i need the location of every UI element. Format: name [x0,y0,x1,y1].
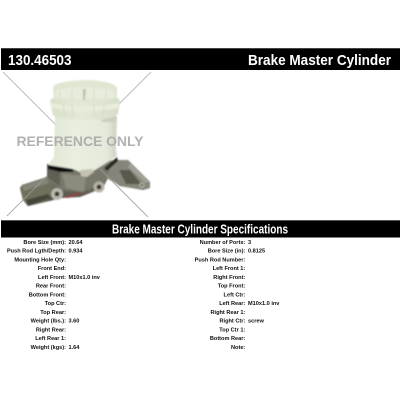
row: Push Rod Number: [195,258,245,264]
value: M10x1.0 inv [68,275,101,281]
port bosses [51,188,63,200]
row: Bottom Front: [29,292,66,298]
header bar [1,48,400,70]
watermark text: REFERENCE ONLY [16,133,144,149]
value: 3 [248,240,251,246]
specifications bar: Brake Master Cylinder Specifications [112,222,288,236]
cap top [53,80,117,102]
row: Right Ctr: [220,319,245,325]
row: Top Front: [218,284,245,290]
row: Mounting Hole Qty: [14,258,66,264]
value: 0.8125 [248,249,265,255]
row: Bore Size (in): [208,249,245,255]
specifications right column [195,240,280,351]
row: Note: [231,345,245,351]
watermark cross lines [3,72,151,217]
row: Bottom Rear: [210,336,245,342]
row: Weight (kgs): [31,345,66,351]
left barrel end [20,177,52,206]
value: 3.60 [68,319,79,325]
specifications left column [7,240,101,351]
specifications bar [1,220,400,238]
reservoir clip [80,169,94,177]
row: Right Rear: [36,327,66,333]
value: screw [248,319,265,325]
watermark lines over the photo [7,169,148,217]
right mounting flange [106,160,150,190]
row: Left Front 1: [213,266,245,272]
value: 1.64 [68,345,80,351]
row: Top Ctr 1: [219,327,245,333]
row: Top Rear: [40,310,66,316]
value: 0.934 [68,249,83,255]
row: Right Rear 1: [210,310,245,316]
reservoir body [48,116,117,174]
cap skirt [50,96,120,120]
centre block [47,170,105,192]
part number: 130.46503 [8,52,72,69]
row: Left Ctr: [224,292,245,298]
value: M10x1.0 inv [248,301,280,307]
photo: brake master cylinder [20,80,150,206]
row: Left Rear 1: [35,336,66,342]
row: Weight (lbs.): [31,319,66,325]
cylinder metal body [20,160,150,206]
row: Left Front: [38,275,66,281]
row: Push Rod Lgth/Depth: [7,249,66,255]
row: Left Rear: [219,301,245,307]
row: Bore Size (mm): [23,240,66,246]
red paint marks [64,192,82,198]
row: Rear Front: [36,284,66,290]
row: Top Ctr: [45,301,66,307]
row: Number of Ports: [200,240,245,246]
row: Right Front: [213,275,245,281]
row: Front End: [38,266,66,272]
value: 20.64 [68,240,83,246]
black seal ring [47,164,74,172]
